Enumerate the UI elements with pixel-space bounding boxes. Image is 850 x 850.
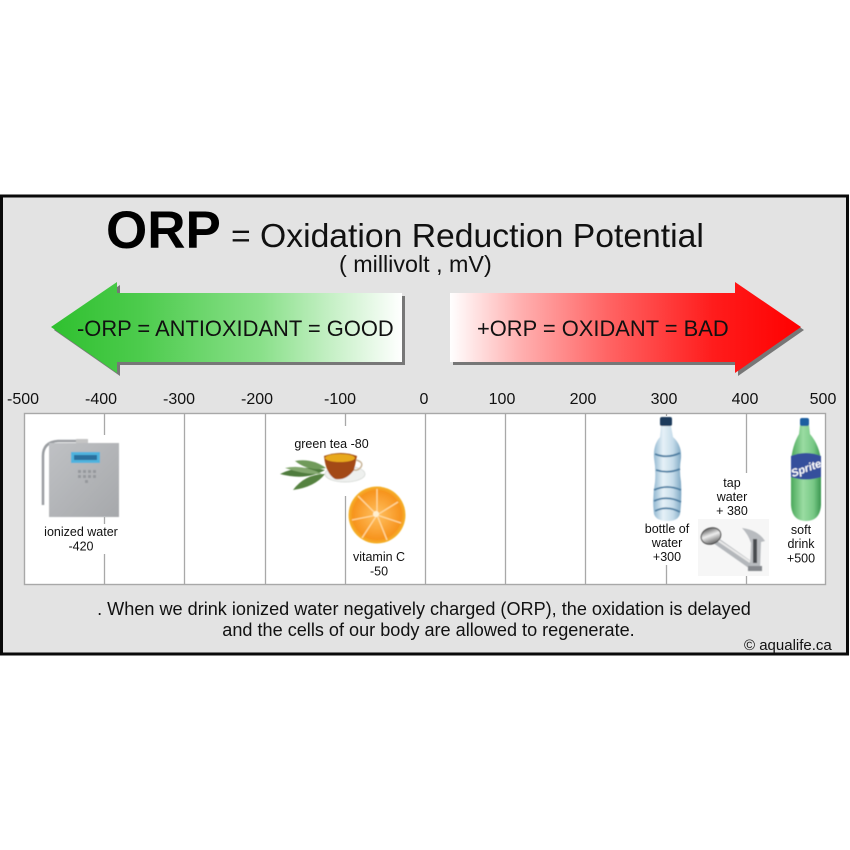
label: bottle of water: bottle of bbox=[645, 522, 690, 536]
item: green tea bbox=[280, 426, 369, 496]
icon: tea cup and leaves bbox=[280, 453, 365, 490]
label: green tea: green tea -80 bbox=[294, 437, 369, 451]
scale labels: -500 bbox=[7, 391, 39, 408]
item: soft drink bbox=[787, 418, 823, 566]
label: soft drink: +500 bbox=[787, 552, 815, 566]
title: ORP bbox=[106, 201, 221, 260]
label: ionized water: -420 bbox=[68, 540, 94, 554]
label: soft drink: soft bbox=[791, 523, 812, 537]
label: ionized water: ionized water bbox=[44, 525, 118, 539]
label: bottle of water: +300 bbox=[653, 550, 681, 564]
scale labels: -300 bbox=[163, 391, 195, 408]
label: soft drink: drink bbox=[787, 537, 815, 551]
label: tap water: water bbox=[716, 490, 747, 504]
scale labels: -200 bbox=[241, 391, 273, 408]
icon: green soda bottle bbox=[790, 418, 823, 521]
scale labels: 400 bbox=[732, 391, 758, 408]
text block: explanation: . When we drink ionized water negatively charged (ORP), the oxidation is delayed bbox=[97, 599, 751, 619]
scale labels bbox=[7, 391, 836, 408]
scale labels: 0 bbox=[420, 391, 429, 408]
icon: water bottle bbox=[653, 417, 681, 521]
chart: ORP scale grid bbox=[24, 413, 826, 584]
panel: main frame bbox=[2, 196, 848, 654]
arrow: antioxidant good: -ORP = ANTIOXIDANT = GOOD bbox=[77, 316, 394, 341]
item: vitamin C bbox=[348, 486, 408, 578]
scale labels: -100 bbox=[324, 391, 356, 408]
arrow: oxidant bad: +ORP = OXIDANT = BAD bbox=[477, 316, 729, 341]
text block: explanation: and the cells of our body are allowed to regenerate. bbox=[222, 620, 635, 640]
scale labels: 200 bbox=[570, 391, 596, 408]
item: tap water bbox=[698, 473, 775, 576]
label: tap water: tap bbox=[723, 476, 741, 490]
item: bottle of water bbox=[645, 416, 690, 565]
label: vitamin C: vitamin C bbox=[353, 550, 405, 564]
icon: orange slice bbox=[348, 486, 406, 544]
scale labels: 100 bbox=[489, 391, 515, 408]
scale labels: 500 bbox=[810, 391, 836, 408]
title: = Oxidation Reduction Potential bbox=[231, 217, 704, 255]
item: ionized water bbox=[43, 435, 119, 554]
subtitle: unit: ( millivolt , mV) bbox=[339, 251, 492, 277]
scale labels: 300 bbox=[651, 391, 677, 408]
icon: green soda bottle: Sprite bbox=[790, 458, 823, 480]
arrow: antioxidant good bbox=[51, 282, 405, 376]
label: tap water: + 380 bbox=[716, 504, 748, 518]
scale labels: -400 bbox=[85, 391, 117, 408]
icon: water ionizer bbox=[43, 439, 119, 517]
icon: chrome faucet bbox=[698, 519, 769, 576]
label: bottle of water: water bbox=[651, 536, 682, 550]
arrow: oxidant bad bbox=[450, 282, 804, 376]
title bbox=[106, 201, 704, 260]
label: vitamin C: -50 bbox=[370, 564, 388, 578]
credit: © aqualife.ca bbox=[744, 637, 832, 654]
